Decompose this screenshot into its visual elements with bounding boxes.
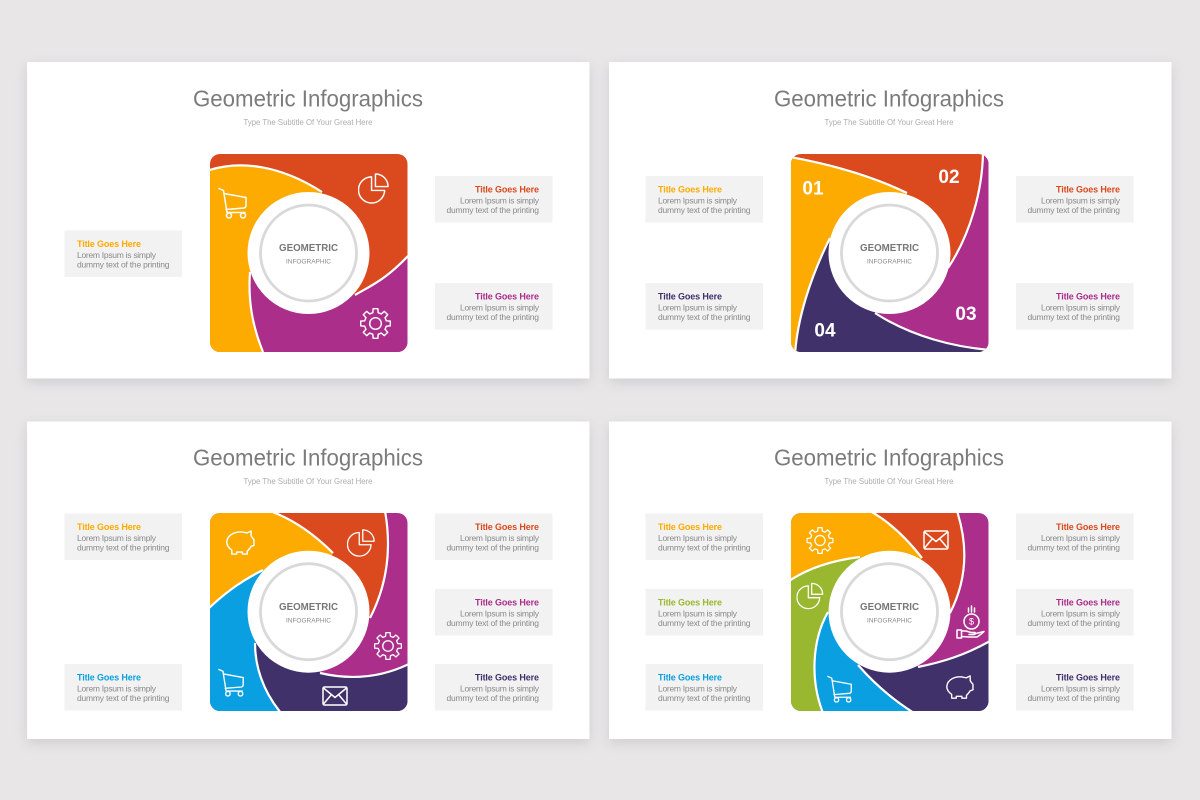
title: Geometric Infographics: [193, 86, 423, 112]
text box: blue: Lorem Ipsum is simply: [658, 684, 738, 694]
diagram: three-part swirl: INFOGRAPHIC: [286, 258, 331, 266]
text box: dark: Lorem Ipsum is simply: [460, 684, 540, 694]
icon: pie chart: [797, 583, 823, 609]
card: top-right slide: [609, 62, 1172, 378]
diagram: five-part swirl: GEOMETRIC: [279, 601, 338, 613]
subtitle: Type The Subtitle Of Your Great Here: [244, 117, 373, 127]
text box: red: Title Goes Here: [475, 522, 539, 532]
diagram: four-part swirl: GEOMETRIC: [860, 242, 919, 254]
text box: dark: [1016, 664, 1134, 710]
text box: purple: [435, 589, 552, 636]
number 02: 02: [938, 167, 960, 188]
text box: dark: Title Goes Here: [1056, 672, 1120, 682]
subtitle: Type The Subtitle Of Your Great Here: [824, 476, 954, 486]
number 04: 04: [814, 320, 836, 342]
icon: envelope: [924, 531, 948, 549]
diagram: three-part swirl: GEOMETRIC: [279, 242, 338, 254]
text box: red: Title Goes Here: [475, 184, 539, 194]
text box: yellow: [646, 514, 763, 560]
text box: blue: [64, 664, 182, 710]
icon: piggy bank: [947, 676, 973, 698]
text box: yellow: Lorem Ipsum is simply: [658, 533, 738, 543]
text box: dark: dummy text of the printing: [446, 693, 539, 703]
text box: yellow: dummy text of the printing: [658, 205, 751, 215]
subtitle: Type The Subtitle Of Your Great Here: [244, 476, 373, 486]
text box: red: [1016, 176, 1134, 222]
diagram: four-part swirl: INFOGRAPHIC: [867, 258, 912, 266]
diagram: four-part swirl: [791, 154, 988, 352]
text box: purple: Title Goes Here: [475, 292, 539, 302]
text box: dark: dummy text of the printing: [1028, 693, 1120, 703]
subtitle: Type The Subtitle Of Your Great Here: [824, 117, 954, 127]
text box: purple: Title Goes Here: [475, 598, 539, 608]
card: top-left slide: [27, 62, 590, 378]
text box: red: Title Goes Here: [1056, 522, 1120, 532]
text box: yellow: dummy text of the printing: [658, 542, 751, 552]
card: bottom-left slide: [27, 422, 590, 739]
text box: red: [1016, 514, 1134, 560]
icon: shopping cart: [219, 188, 246, 218]
text box: blue: dummy text of the printing: [77, 693, 170, 703]
diagram: six-part swirl: INFOGRAPHIC: [867, 618, 912, 624]
text box: dark: Lorem Ipsum is simply: [658, 302, 738, 312]
icon: envelope: [323, 687, 347, 705]
text box: green: Title Goes Here: [658, 598, 722, 608]
text box: yellow: dummy text of the printing: [77, 542, 170, 552]
diagram: six-part swirl: GEOMETRIC: [860, 601, 919, 613]
title: Geometric Infographics: [774, 86, 1004, 112]
text box: red: Lorem Ipsum is simply: [1041, 533, 1121, 543]
text box: dark: dummy text of the printing: [658, 312, 751, 322]
text box: yellow: Lorem Ipsum is simply: [658, 196, 738, 206]
text box: yellow: Title Goes Here: [77, 522, 141, 532]
text box: green: dummy text of the printing: [658, 618, 751, 628]
text box: red: Lorem Ipsum is simply: [460, 196, 540, 206]
text box: purple: dummy text of the printing: [1028, 312, 1120, 322]
diagram: six-part swirl: [780, 511, 990, 713]
text box: red: Lorem Ipsum is simply: [460, 533, 540, 543]
icon: hand with coin: [957, 606, 984, 638]
text box: blue: Title Goes Here: [77, 672, 141, 682]
text box: dark: [435, 664, 552, 710]
text box: red: dummy text of the printing: [446, 205, 539, 215]
icon: pie chart: [347, 530, 374, 556]
text box: dark: Lorem Ipsum is simply: [1041, 684, 1121, 694]
text box: yellow: [646, 176, 763, 222]
diagram: five-part swirl: INFOGRAPHIC: [286, 618, 331, 624]
text box: purple: dummy text of the printing: [446, 312, 539, 322]
text box: purple: Lorem Ipsum is simply: [1041, 608, 1121, 618]
text box: blue: Lorem Ipsum is simply: [77, 684, 157, 694]
text box: purple: Lorem Ipsum is simply: [1041, 302, 1121, 312]
icon: gear: [361, 309, 390, 338]
text box: purple: Lorem Ipsum is simply: [460, 302, 540, 312]
text box: yellow: Lorem Ipsum is simply: [77, 250, 157, 260]
icon: shopping cart: [219, 669, 243, 696]
text box: red: dummy text of the printing: [1028, 205, 1120, 215]
text box: green: Lorem Ipsum is simply: [658, 608, 738, 618]
title: Geometric Infographics: [193, 444, 423, 470]
text box: purple: dummy text of the printing: [446, 618, 539, 628]
text box: purple: Title Goes Here: [1056, 598, 1120, 608]
text box: yellow: dummy text of the printing: [77, 260, 170, 270]
number 03: 03: [955, 304, 977, 325]
text box: red: Lorem Ipsum is simply: [1041, 196, 1121, 206]
text box: purple: [1016, 283, 1134, 330]
icon: shopping cart: [828, 676, 851, 702]
text box: dark: Title Goes Here: [658, 292, 722, 302]
text box: blue: [646, 664, 763, 710]
text box: green: [646, 589, 763, 636]
icon: pie chart: [358, 174, 388, 203]
text box: purple: Title Goes Here: [1056, 292, 1120, 302]
text box: yellow: Lorem Ipsum is simply: [77, 533, 157, 543]
text box: red: [435, 514, 552, 560]
number 01: 01: [802, 178, 824, 200]
text box: dark: [646, 283, 763, 330]
text box: blue: Title Goes Here: [658, 672, 722, 682]
icon: gear: [375, 633, 401, 659]
text box: purple: [435, 283, 552, 330]
text box: yellow: [64, 514, 182, 560]
text box: yellow: Title Goes Here: [658, 522, 722, 532]
diagram: three-part swirl: [210, 154, 408, 352]
text box: yellow: Title Goes Here: [77, 239, 141, 249]
diagram: five-part swirl: [200, 511, 409, 713]
text box: red: Title Goes Here: [1056, 184, 1120, 194]
text box: purple: Lorem Ipsum is simply: [460, 608, 540, 618]
icon: piggy bank: [227, 531, 254, 554]
title: Geometric Infographics: [774, 444, 1004, 470]
text box: blue: dummy text of the printing: [658, 693, 751, 703]
card: bottom-right slide: [609, 422, 1172, 739]
text box: yellow: [64, 230, 182, 277]
text box: purple: dummy text of the printing: [1028, 618, 1120, 628]
text box: dark: Title Goes Here: [475, 672, 539, 682]
text box: red: [435, 176, 552, 222]
text box: red: dummy text of the printing: [446, 542, 539, 552]
text box: red: dummy text of the printing: [1028, 542, 1120, 552]
text box: yellow: Title Goes Here: [658, 184, 722, 194]
text box: purple: [1016, 589, 1134, 636]
icon: hand with coin: $: [969, 617, 974, 627]
icon: gear: [807, 528, 833, 553]
